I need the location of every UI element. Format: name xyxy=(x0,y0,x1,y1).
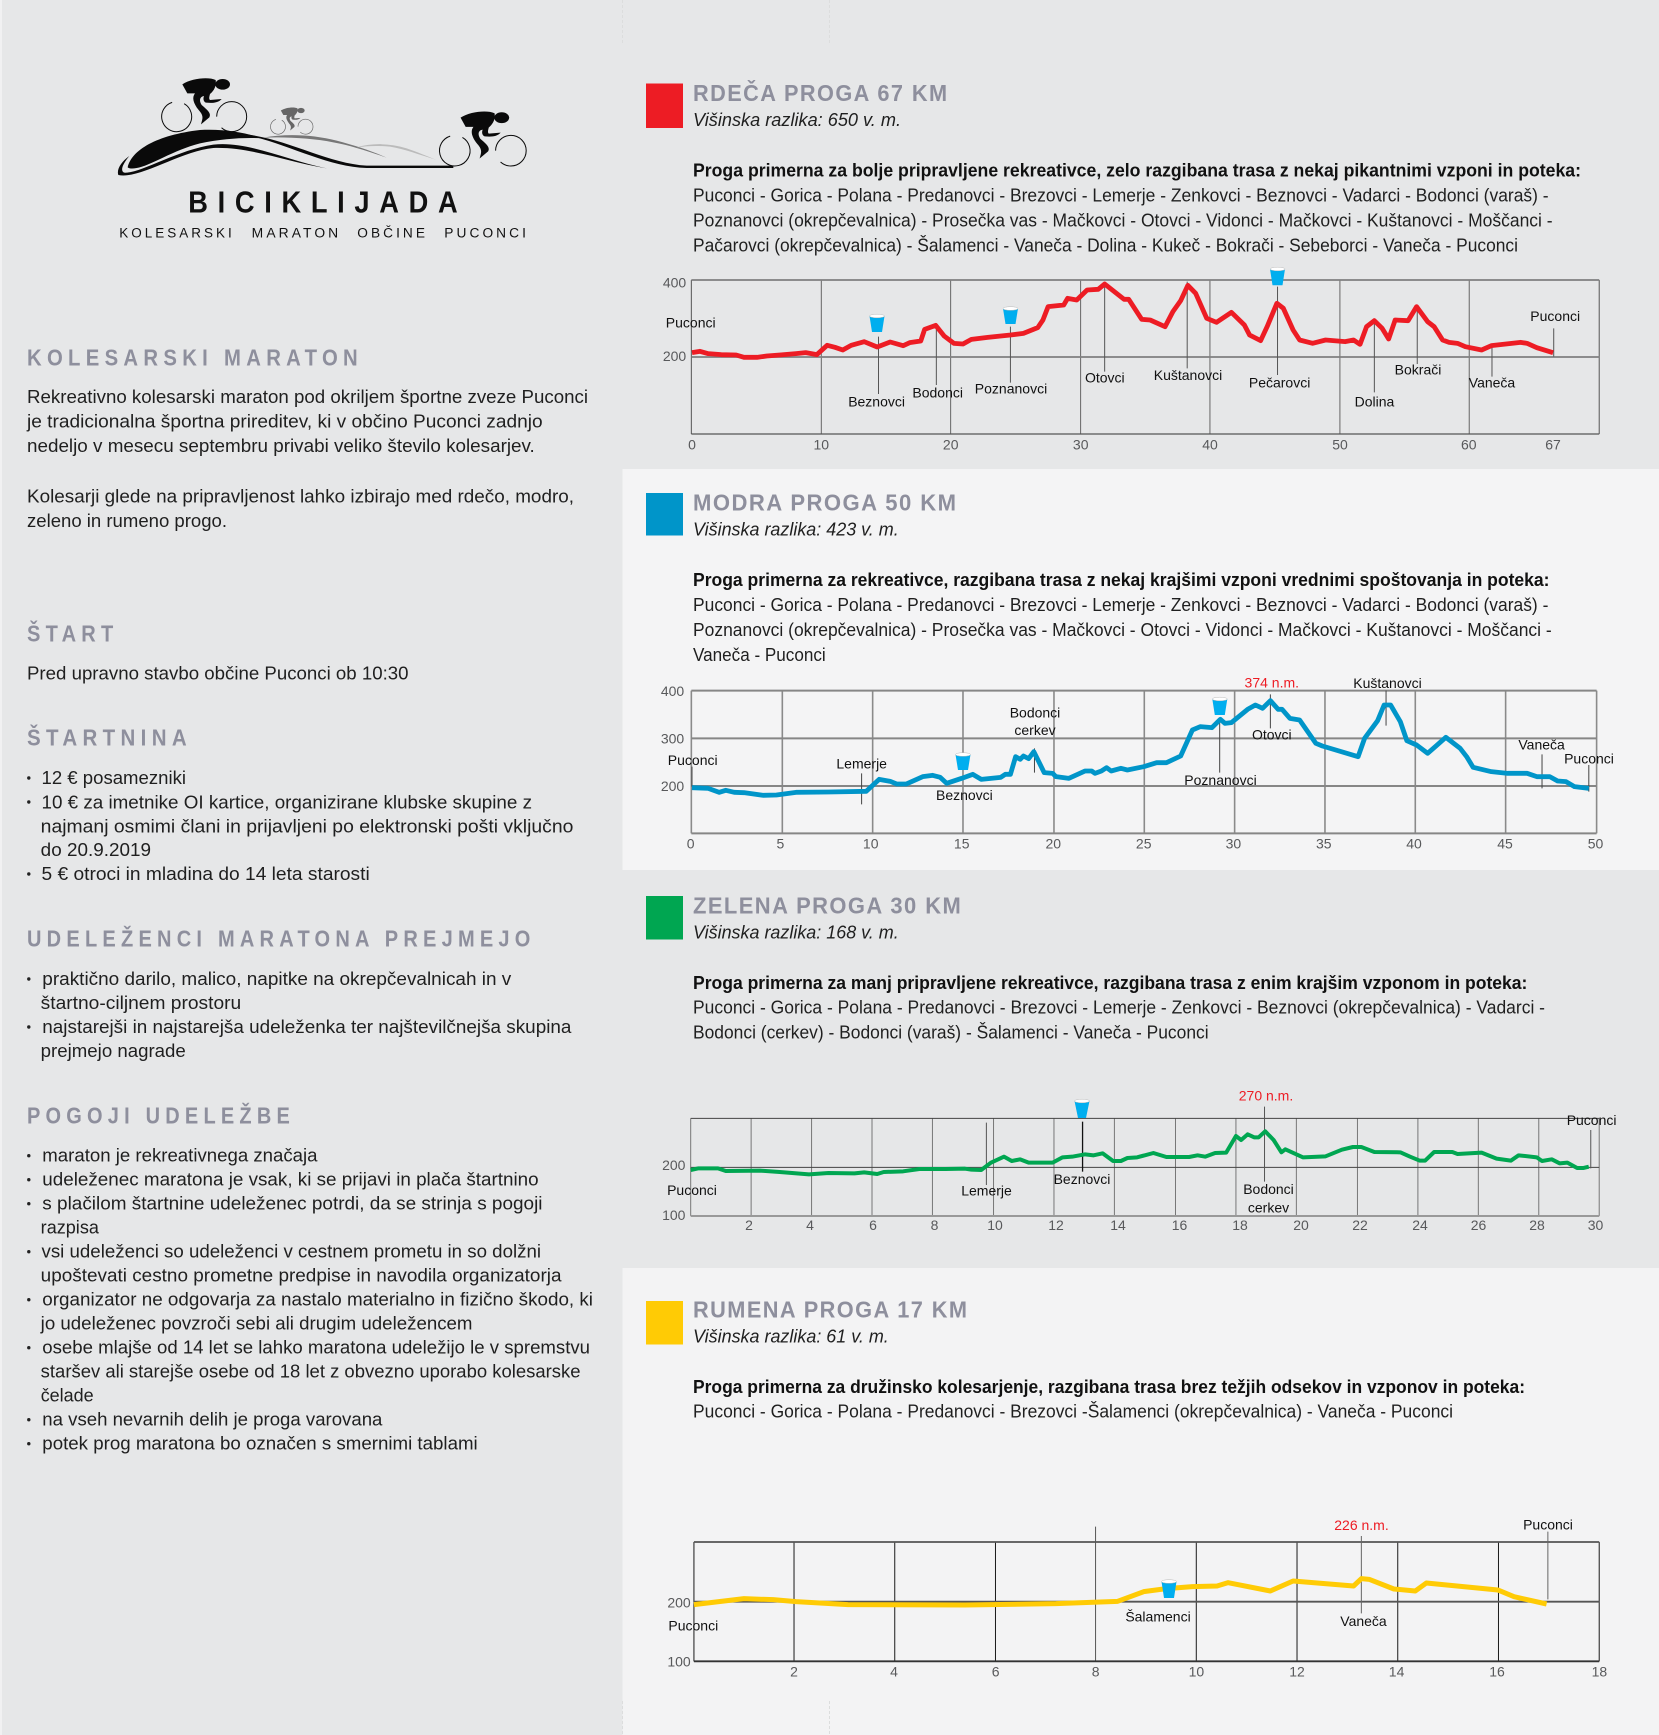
red route description: Proga primerna za bolje pripravljene rekreativce, zelo razgibana trasa z nekaj pikantnimi vzponi in poteka: xyxy=(693,161,1581,181)
place labels: Puconci xyxy=(668,752,718,768)
axis labels: 10 xyxy=(987,1217,1003,1233)
axis labels: 50 xyxy=(1332,436,1348,452)
place labels xyxy=(668,674,1614,803)
refreshment cup icon xyxy=(1074,1099,1090,1118)
conditions list: čelade xyxy=(41,1386,94,1406)
place labels: Beznovci xyxy=(1054,1171,1110,1187)
axis labels: 40 xyxy=(1406,835,1422,851)
yellow route description xyxy=(693,1377,1525,1422)
place labels: 270 n.m. xyxy=(1239,1088,1293,1104)
conditions list: osebe mlajše od 14 let se lahko maratona udeležijo le v spremstvu xyxy=(42,1338,590,1358)
place labels xyxy=(668,1516,1573,1634)
red route elevation: Višinska razlika: 650 v. m. xyxy=(693,110,901,130)
axis labels: 40 xyxy=(1202,436,1218,452)
yellow route elevation: Višinska razlika: 61 v. m. xyxy=(693,1326,889,1346)
axis labels: 30 xyxy=(1226,835,1241,851)
axis labels: 10 xyxy=(863,835,879,851)
axis labels: 8 xyxy=(1092,1664,1100,1680)
place labels: Otovci xyxy=(1085,369,1125,385)
logo wordmark: BICIKLIJADA xyxy=(188,185,467,220)
place labels: Bodonci xyxy=(1243,1181,1294,1197)
place labels: Puconci xyxy=(1523,1516,1573,1532)
axis labels: 16 xyxy=(1172,1217,1187,1233)
blue colour square xyxy=(646,493,683,536)
conditions list: udeleženec maratona je vsak, ki se prijavi in plača štartnino xyxy=(42,1170,539,1190)
axis labels: 10 xyxy=(814,436,829,452)
place labels: 374 n.m. xyxy=(1245,674,1299,690)
conditions list: s plačilom štartnine udeleženec potrdi, da se strinja s pogoji xyxy=(42,1194,543,1214)
section: Štartnina xyxy=(27,724,573,884)
panel: yellow route xyxy=(646,1297,1607,1680)
place labels: 226 n.m. xyxy=(1334,1517,1389,1533)
blue route elevation: Višinska razlika: 423 v. m. xyxy=(693,520,899,540)
place labels: Lemerje xyxy=(836,755,887,771)
fee list: 10 € za imetnike OI kartice, organizirane klubske skupine z xyxy=(42,792,532,812)
axis labels: 100 xyxy=(662,1207,686,1223)
green route description: Bodonci (cerkev) - Bodonci (varaš) - Šalamenci - Vaneča - Puconci xyxy=(693,1022,1209,1043)
place labels: Beznovci xyxy=(848,394,905,410)
fee list xyxy=(27,768,573,884)
axis labels: 18 xyxy=(1232,1217,1248,1233)
green route elevation: Višinska razlika: 168 v. m. xyxy=(693,922,899,942)
rider 2 xyxy=(268,107,313,137)
axis labels: 4 xyxy=(806,1217,814,1233)
refreshment cup icon xyxy=(1162,1580,1176,1598)
blue route description: Puconci - Gorica - Polana - Predanovci - Brezovci - Lemerje - Zenkovci - Beznovci - Vadarci - Bodonci (varaš) - xyxy=(693,595,1548,615)
axis labels: 14 xyxy=(1110,1217,1126,1233)
place labels: Kuštanovci xyxy=(1154,367,1222,383)
green route elevation chart xyxy=(662,1088,1617,1233)
place labels: Puconci xyxy=(1564,750,1614,766)
place labels: cerkev xyxy=(1248,1199,1289,1215)
axis labels: 20 xyxy=(1293,1217,1309,1233)
place labels: Bodonci xyxy=(1010,704,1060,720)
logo tagline: OBČINE xyxy=(357,225,428,240)
panel: red route xyxy=(646,79,1599,452)
axis labels: 12 xyxy=(1048,1217,1064,1233)
green route description xyxy=(693,973,1545,1043)
axis labels: 22 xyxy=(1352,1217,1368,1233)
conditions list xyxy=(27,1146,593,1454)
intro text: je tradicionalna športna prireditev, ki v občino Puconci zadnjo xyxy=(26,412,543,432)
heading: POGOJI UDELEŽBE xyxy=(27,1102,295,1128)
blue route description xyxy=(693,570,1552,665)
green route description: Proga primerna za manj pripravljene rekreativce, razgibana trasa z enim krajšim vzponom in poteka: xyxy=(693,973,1527,993)
blue route title: MODRA PROGA 50 KM xyxy=(693,490,958,516)
heading: UDELEŽENCI MARATONA PREJMEJO xyxy=(27,925,536,952)
axis labels: 2 xyxy=(745,1217,753,1233)
conditions list: jo udeleženec povzroči sebi ali drugim udeležencem xyxy=(40,1314,473,1334)
axis labels: 0 xyxy=(687,835,695,851)
axis labels: 45 xyxy=(1497,835,1513,851)
place labels: Otovci xyxy=(1252,726,1292,742)
red route description: Puconci - Gorica - Polana - Predanovci - Brezovci - Lemerje - Zenkovci - Beznovci - Vadarci - Bodonci (varaš) - xyxy=(693,185,1549,205)
heading: ŠTARTNINA xyxy=(27,724,192,751)
fee list: 12 € posamezniki xyxy=(42,768,186,788)
axis labels: 15 xyxy=(954,835,970,851)
refreshment cup icons xyxy=(956,697,1227,770)
red route elevation chart xyxy=(663,267,1599,452)
benefits list: najstarejši in najstarejša udeleženka ter najštevilčnejša skupina xyxy=(42,1017,572,1037)
yellow route elevation chart xyxy=(667,1516,1607,1680)
axis labels: 26 xyxy=(1471,1217,1486,1233)
blue route description: Vaneča - Puconci xyxy=(693,645,826,665)
yellow route description: Puconci - Gorica - Polana - Predanovci - Brezovci -Šalamenci (okrepčevalnica) - Vaneča - Puconci xyxy=(693,1401,1453,1422)
conditions list: maraton je rekreativnega značaja xyxy=(42,1146,319,1166)
section: Kolesarski maraton xyxy=(26,345,588,531)
fee list: najmanj osmimi člani in prijavljeni po elektronski pošti vključno xyxy=(41,816,573,836)
axis labels: 300 xyxy=(661,730,684,746)
intro text: Kolesarji glede na pripravljenost lahko izbirajo med rdečo, modro, xyxy=(27,487,574,507)
axis labels: 200 xyxy=(663,348,686,364)
fee list: 5 € otroci in mladina do 14 leta starosti xyxy=(42,864,370,884)
conditions list: potek prog maratona bo označen s smernimi tablami xyxy=(42,1434,478,1454)
benefits list: prejmejo nagrade xyxy=(41,1041,186,1061)
place labels xyxy=(666,308,1580,410)
section: Štart xyxy=(27,620,408,683)
red route title: RDEČA PROGA 67 KM xyxy=(693,79,948,106)
conditions list: organizator ne odgovarja za nastalo materialno in fizično škodo, ki xyxy=(42,1290,593,1310)
axis labels: 6 xyxy=(992,1664,1000,1680)
axis labels: 20 xyxy=(943,436,959,452)
axis labels: 14 xyxy=(1389,1664,1405,1680)
place labels: Puconci xyxy=(1567,1112,1617,1128)
place labels: Puconci xyxy=(1530,308,1580,324)
intro text: Rekreativno kolesarski maraton pod okriljem športne zveze Puconci xyxy=(27,387,588,407)
heading: ŠTART xyxy=(27,620,118,647)
conditions list: staršev ali starejše osebe od 18 let z obvezno uporabo kolesarske xyxy=(41,1362,580,1382)
place labels: Puconci xyxy=(667,1182,717,1198)
place labels: Vaneča xyxy=(1340,1613,1387,1629)
axis labels xyxy=(667,1595,1607,1680)
benefits list: štartno-ciljnem prostoru xyxy=(41,993,241,1013)
axis labels xyxy=(662,1157,1603,1233)
green route description: Puconci - Gorica - Polana - Predanovci - Brezovci - Lemerje - Zenkovci - Beznovci (okrepčevalnica) - Vadarci - xyxy=(693,998,1545,1018)
axis labels: 200 xyxy=(661,778,684,794)
axis labels: 12 xyxy=(1289,1664,1305,1680)
axis labels: 100 xyxy=(667,1654,691,1670)
axis labels: 8 xyxy=(931,1217,939,1233)
benefits list xyxy=(27,969,572,1061)
blue route elevation chart xyxy=(661,674,1614,851)
place labels: Beznovci xyxy=(936,787,993,803)
axis labels: 4 xyxy=(890,1664,898,1680)
place labels: Puconci xyxy=(666,315,716,331)
conditions list: na vseh nevarnih delih je proga varovana xyxy=(42,1410,383,1430)
blue route description: Proga primerna za rekreativce, razgibana trasa z nekaj krajšimi vzponi vrednimi spoštovanja in poteka: xyxy=(693,570,1550,590)
green colour square xyxy=(646,896,683,940)
place labels: Bokrači xyxy=(1395,361,1441,377)
panel: green route xyxy=(646,893,1617,1233)
place labels: Vaneča xyxy=(1469,375,1515,391)
black hill xyxy=(128,130,263,169)
logo tagline: MARATON xyxy=(252,225,341,240)
axis labels: 24 xyxy=(1412,1217,1428,1233)
axis labels: 20 xyxy=(1046,835,1061,851)
axis labels: 67 xyxy=(1545,436,1561,452)
conditions list: razpisa xyxy=(41,1218,100,1238)
axis labels: 5 xyxy=(777,835,785,851)
refreshment cup icons xyxy=(870,267,1285,332)
start location text: Pred upravno stavbo občine Puconci ob 10:30 xyxy=(27,663,408,683)
axis labels: 200 xyxy=(667,1595,691,1611)
logo tagline: PUCONCI xyxy=(444,225,529,240)
place labels: Poznanovci xyxy=(1184,772,1257,788)
yellow route title: RUMENA PROGA 17 KM xyxy=(693,1297,968,1323)
axis labels: 18 xyxy=(1592,1664,1607,1680)
axis labels: 30 xyxy=(1073,436,1089,452)
rider 3 xyxy=(434,112,526,172)
benefits list: praktično darilo, malico, napitke na okrepčevalnicah in v xyxy=(42,969,511,989)
conditions list: vsi udeleženci so udeleženci v cestnem prometu in so dolžni xyxy=(42,1242,541,1262)
logo tagline: KOLESARSKI xyxy=(119,225,235,240)
place labels: Lemerje xyxy=(961,1182,1012,1198)
red colour square xyxy=(646,84,683,128)
logo: Biciklijada xyxy=(118,78,529,240)
place labels: Poznanovci xyxy=(975,380,1047,396)
axis labels: 400 xyxy=(661,683,684,699)
place labels xyxy=(667,1088,1617,1215)
place labels: Bodonci xyxy=(912,385,963,401)
green route title: ZELENA PROGA 30 KM xyxy=(693,893,962,919)
red route description: Poznanovci (okrepčevalnica) - Prosečka vas - Mačkovci - Otovci - Vidonci - Mačkovci - Kuštanovci - Moščanci - xyxy=(693,210,1553,230)
logo illustration: cyclists on hills xyxy=(118,78,526,175)
axis labels: 16 xyxy=(1489,1664,1505,1680)
axis labels: 2 xyxy=(790,1664,798,1680)
yellow colour square xyxy=(646,1301,683,1344)
axis labels: 25 xyxy=(1136,835,1152,851)
axis labels: 30 xyxy=(1588,1217,1603,1233)
axis labels: 35 xyxy=(1316,835,1332,851)
axis labels: 6 xyxy=(869,1217,877,1233)
axis labels xyxy=(663,274,1561,452)
yellow route description: Proga primerna za družinsko kolesarjenje, razgibana trasa brez težjih odsekov in vzponov in poteka: xyxy=(693,1377,1525,1397)
red route description: Pačarovci (okrepčevalnica) - Šalamenci - Vaneča - Dolina - Kukeč - Bokrači - Sebeborci - Vaneča - Puconci xyxy=(693,234,1518,255)
rider 1 xyxy=(156,78,247,137)
intro text: zeleno in rumeno progo. xyxy=(27,511,227,531)
place labels: cerkev xyxy=(1014,722,1056,738)
axis labels: 60 xyxy=(1461,436,1477,452)
axis labels: 0 xyxy=(688,436,696,452)
panel: blue route xyxy=(646,490,1614,851)
section: Udeleženci maratona prejmejo xyxy=(27,925,572,1061)
axis labels xyxy=(661,683,1603,851)
axis labels: 50 xyxy=(1588,835,1603,851)
axis labels: 10 xyxy=(1189,1664,1204,1680)
place labels: Pečarovci xyxy=(1249,375,1310,391)
red route description xyxy=(693,161,1581,255)
blue route description: Poznanovci (okrepčevalnica) - Prosečka vas - Mačkovci - Otovci - Vidonci - Mačkovci - Kuštanovci - Moščanci - xyxy=(693,620,1552,640)
intro text xyxy=(26,387,588,531)
heading: KOLESARSKI MARATON xyxy=(27,345,363,371)
intro text: nedeljo v mesecu septembru privabi veliko število kolesarjev. xyxy=(27,436,535,456)
section: Pogoji udeležbe xyxy=(27,1102,593,1454)
fee list: do 20.9.2019 xyxy=(41,840,151,860)
axis labels: 200 xyxy=(662,1157,686,1173)
place labels: Šalamenci xyxy=(1125,1609,1191,1625)
axis labels: 400 xyxy=(663,274,686,290)
place labels: Puconci xyxy=(668,1618,718,1634)
axis labels: 28 xyxy=(1529,1217,1545,1233)
logo tagline xyxy=(119,225,529,240)
place labels: Kuštanovci xyxy=(1353,675,1422,691)
conditions list: upoštevati cestno prometne predpise in navodila organizatorja xyxy=(41,1266,563,1286)
place labels: Vaneča xyxy=(1518,736,1565,752)
place labels: Dolina xyxy=(1355,394,1395,410)
